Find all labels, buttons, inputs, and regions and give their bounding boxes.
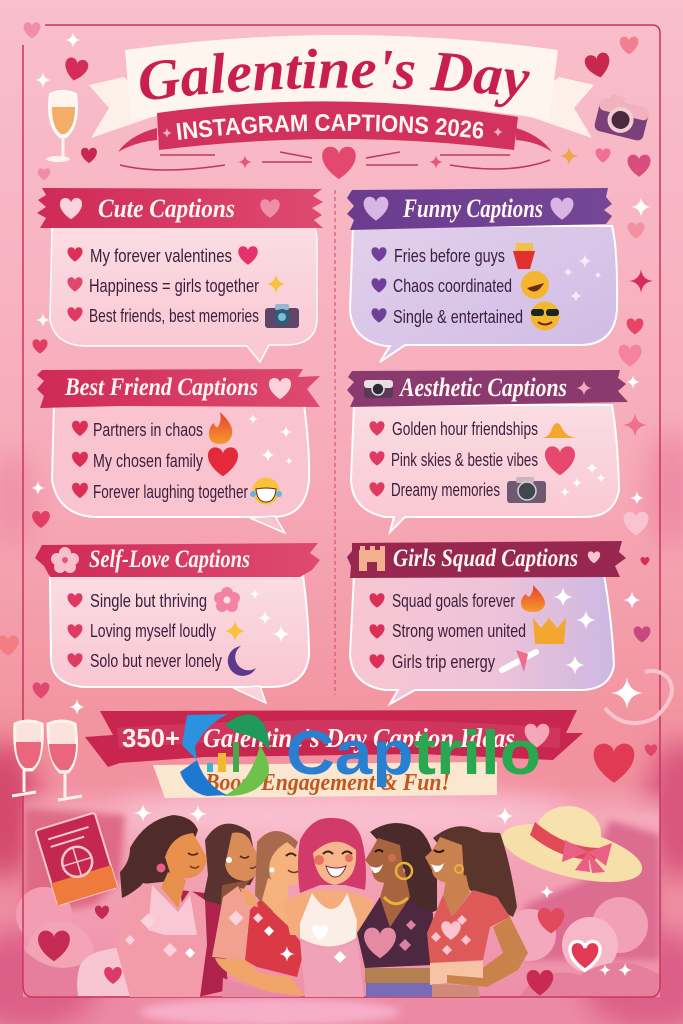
caption list: Solo but never lonely	[90, 650, 223, 671]
speech bubble	[350, 226, 617, 362]
caption list: Single & entertained	[393, 306, 523, 327]
heading banner	[347, 188, 612, 230]
divider heart	[322, 147, 356, 179]
icon: laughing emoji	[250, 478, 282, 504]
icon: airplane emoji	[502, 650, 536, 672]
panel: funny captions	[347, 188, 617, 362]
flourish	[118, 128, 552, 170]
icon: red heart emoji	[208, 447, 238, 476]
caption list	[369, 418, 538, 500]
tagline strip	[153, 762, 497, 798]
icon: champagne glasses	[12, 721, 82, 800]
logo wordmark: Captrilo	[286, 719, 541, 788]
friend 2	[180, 824, 261, 997]
heading: Girls Squad Captions	[393, 545, 578, 572]
icon: heart	[588, 551, 600, 563]
caption list: My forever valentines	[90, 245, 232, 266]
caption list: Golden hour friendships	[392, 418, 538, 439]
friend 4	[283, 818, 373, 997]
heading: Cute Captions	[98, 194, 235, 223]
icon: fries emoji	[513, 243, 535, 269]
subtitle ribbon: INSTAGRAM CAPTIONS 2026	[176, 114, 484, 140]
heading: Self-Love Captions	[89, 546, 250, 573]
heading banner	[37, 369, 320, 408]
icon: passport	[35, 813, 117, 905]
icon: heart	[364, 197, 388, 221]
caption list: Partners in chaos	[93, 419, 203, 440]
speech bubble	[50, 575, 309, 687]
caption list: Pink skies & bestie vibes	[391, 449, 538, 470]
speech bubble	[351, 405, 619, 532]
caption list: Happiness = girls together	[89, 275, 259, 296]
speech bubble	[50, 226, 317, 362]
caption list: Chaos coordinated	[393, 275, 512, 296]
icon: heart	[525, 724, 549, 748]
caption list: Girls trip energy	[392, 651, 496, 672]
ribbon tails	[89, 77, 594, 138]
caption list: Best friends, best memories	[89, 305, 259, 326]
illustration: group of friends	[115, 815, 528, 997]
icon: camera	[593, 92, 651, 142]
caption list	[67, 590, 223, 671]
speech bubble	[52, 405, 309, 517]
heading banner	[37, 188, 323, 228]
friend 5	[357, 823, 437, 997]
friend 6	[425, 826, 528, 997]
bottom banner	[85, 710, 583, 798]
icon: camera emoji	[265, 304, 299, 328]
icon: sparkles emoji	[266, 274, 286, 294]
count: 350+	[122, 723, 180, 753]
caption list: Dreamy memories	[391, 479, 500, 500]
subtitle ribbon	[157, 101, 518, 150]
banner title: Galentine's Day Caption Ideas	[203, 723, 515, 753]
icon: straw hat	[496, 806, 648, 894]
icon: sunglasses emoji	[530, 302, 560, 330]
friend 1	[115, 815, 207, 997]
title: Galentine's Day	[140, 48, 530, 108]
ribbon highlight	[118, 730, 560, 738]
caption list: Squad goals forever	[392, 590, 515, 611]
caption list	[72, 419, 248, 502]
icon: castle	[359, 546, 385, 572]
heading banner	[347, 541, 626, 578]
heading: Funny Captions	[402, 194, 543, 223]
caption list: Loving myself loudly	[90, 620, 217, 641]
cream banner	[125, 35, 558, 120]
icon: flower	[51, 547, 79, 573]
icon: crown emoji	[533, 618, 566, 644]
sparkles	[563, 254, 602, 302]
icon: fire emoji	[209, 412, 232, 444]
icon: pink heart emoji	[238, 246, 258, 265]
panel: cute captions	[37, 188, 323, 362]
icon: camera	[364, 380, 393, 398]
caption list: Fries before guys	[394, 245, 505, 266]
icon: sparkle	[576, 380, 592, 396]
heading: Aesthetic Captions	[398, 373, 567, 402]
heading banner	[35, 543, 320, 577]
icon: blossom emoji	[214, 587, 240, 612]
sparkles	[248, 414, 293, 465]
title ribbon	[89, 35, 594, 179]
caption list	[67, 245, 259, 326]
watermark logo: Captrilo	[180, 714, 541, 796]
icon: heart	[269, 378, 291, 399]
tagline: Boost Engagement & Fun!	[204, 770, 450, 796]
caption list	[371, 245, 523, 327]
icon: moon emoji	[228, 646, 256, 676]
panel: aesthetic captions	[347, 370, 628, 532]
centre dashed divider	[334, 190, 336, 695]
speech bubble tail	[233, 686, 266, 703]
illustration: scene background	[16, 785, 660, 997]
speech bubble	[350, 575, 614, 704]
ribbon	[85, 710, 583, 767]
friend 3	[212, 831, 305, 997]
icon: fire emoji	[521, 585, 545, 612]
caption list: Strong women united	[392, 620, 526, 641]
sparkles	[250, 589, 290, 643]
logo mark	[180, 714, 270, 796]
icon: sparkling heart emoji	[545, 446, 575, 475]
speech bubble tail	[250, 516, 285, 533]
panel: girls squad captions	[347, 541, 626, 704]
icon: smile emoji	[521, 271, 549, 299]
icon: camera emoji	[507, 477, 546, 503]
icon: sunrise emoji	[543, 423, 576, 438]
panel: best friend captions	[37, 369, 320, 533]
heading banner	[347, 370, 628, 407]
icon: heart	[60, 198, 82, 219]
caption list	[369, 590, 526, 672]
decorative hearts and sparkles	[0, 22, 672, 783]
sparkles	[560, 462, 606, 497]
caption list: Forever laughing together	[93, 481, 248, 502]
panel: self-love captions	[35, 543, 320, 703]
icon: heart shards	[260, 199, 280, 218]
caption list: Single but thriving	[90, 590, 207, 611]
sparkles	[553, 587, 573, 607]
icon: heart	[550, 198, 574, 220]
icon: champagne glass	[46, 91, 77, 162]
icon: sparkles emoji	[224, 620, 246, 642]
caption list: My chosen family	[93, 450, 204, 471]
heading: Best Friend Captions	[64, 374, 258, 401]
